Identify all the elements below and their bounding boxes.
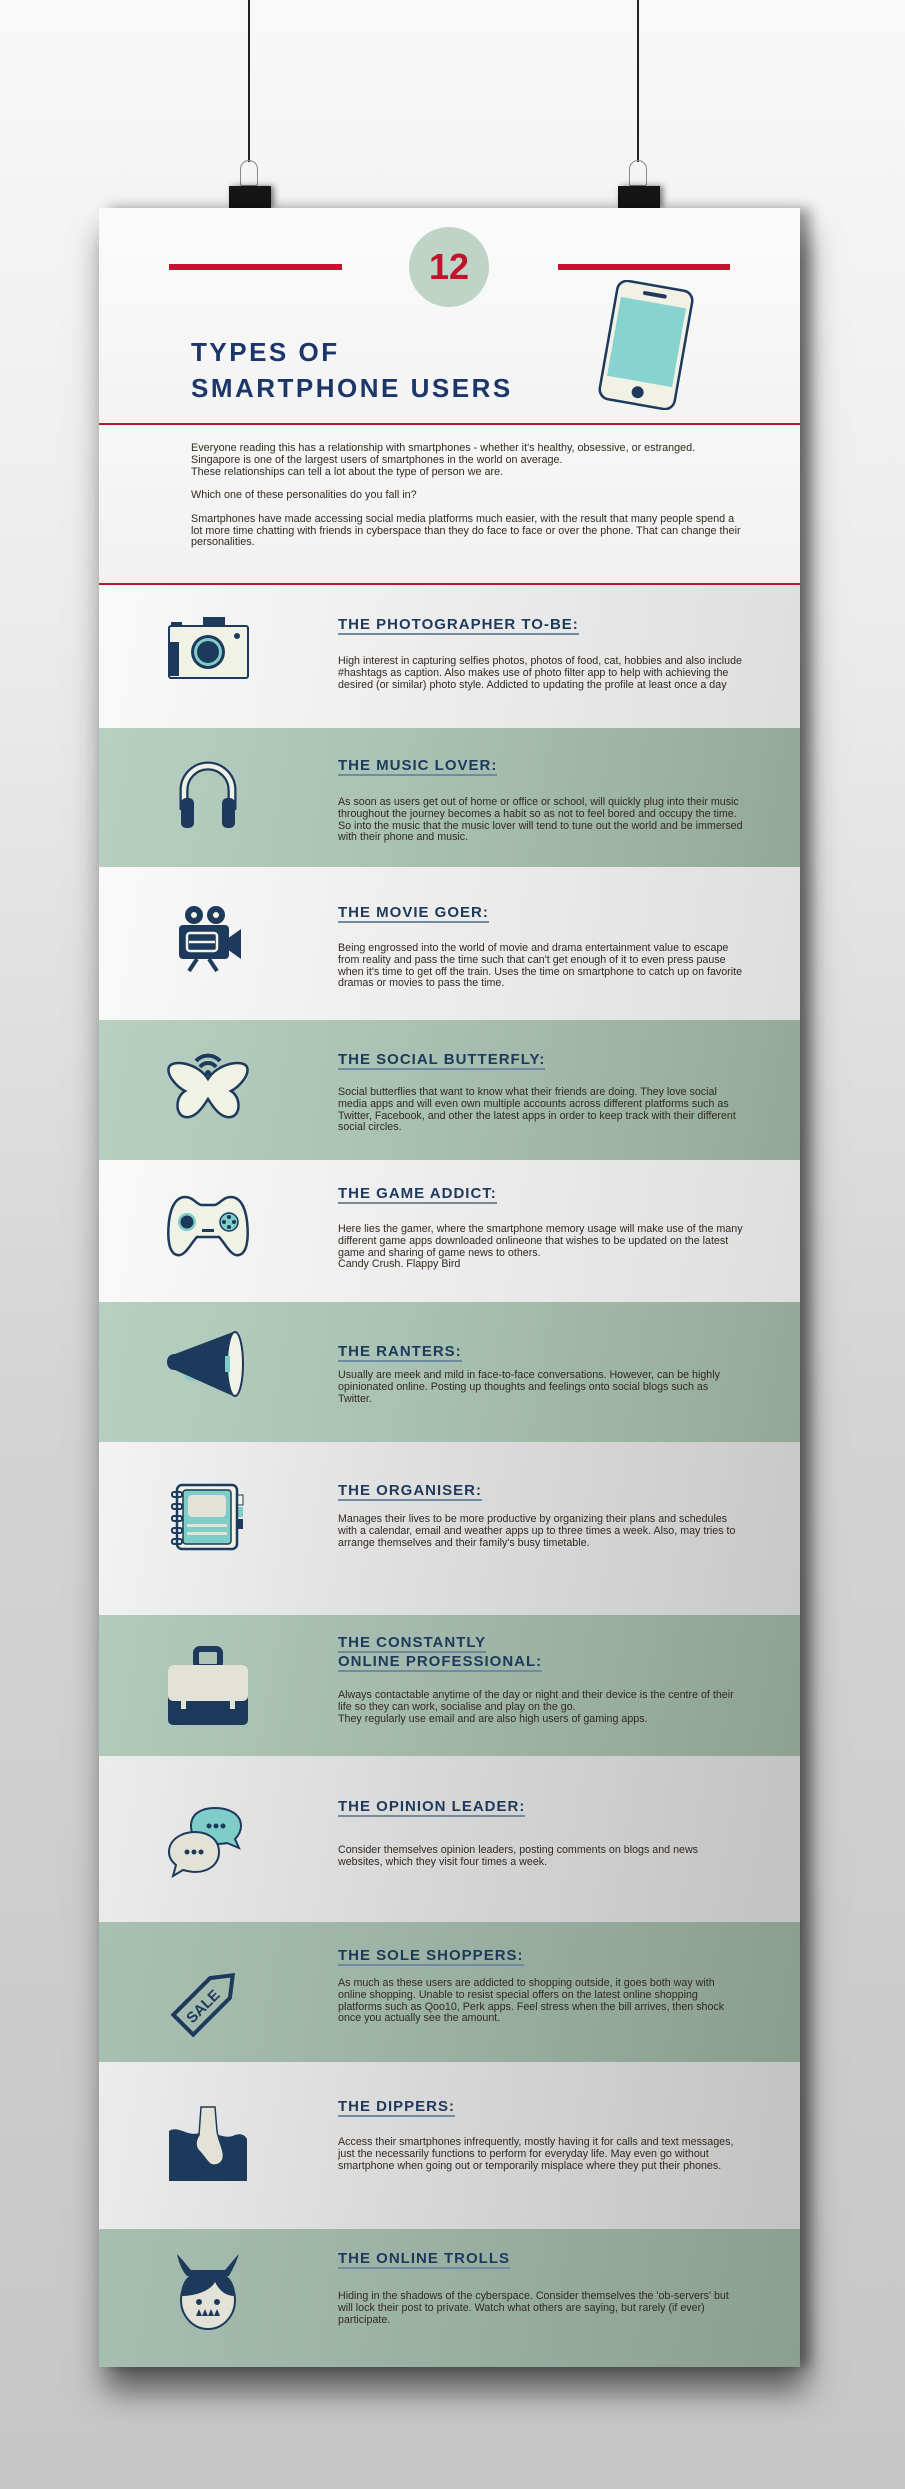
- hanging strings and clips: [228, 0, 668, 208]
- panel: dippers: [99, 2062, 800, 2229]
- text: Being engrossed into the world of movie and drama entertainment value to escape from reality and pass the time such that can't get enough of it to even press pause when it's time to get off the train. Uses the time on smartphone to catch up on favorite dramas or movies to pass the time.: [338, 942, 742, 989]
- icon: sale tag: [170, 1973, 235, 2038]
- panel: social butterfly: [99, 1020, 800, 1160]
- intro text: [99, 425, 800, 584]
- panel: constantly online professional: [99, 1615, 800, 1756]
- icon: troll face: [177, 2254, 239, 2330]
- panel: ranters: [99, 1302, 800, 1442]
- text: [338, 1689, 734, 1725]
- icon: briefcase: [168, 1646, 248, 1725]
- heading: THE SOLE SHOPPERS:: [338, 1947, 524, 1964]
- icon: butterfly with wifi: [167, 1054, 249, 1118]
- panel: opinion leader: [99, 1756, 800, 1922]
- text: Here lies the gamer, where the smartphone memory usage will make use of the many different game apps downloaded onlineone that wishes to be updated on the latest game and sharing of game news to others.: [338, 1223, 743, 1259]
- heading: [338, 1634, 542, 1672]
- heading: ONLINE PROFESSIONAL:: [338, 1653, 542, 1670]
- text: Manages their lives to be more productive by organizing their plans and schedules with a calendar, email and weather apps up to three times a week. Also, may tries to arrange themselves and their family's busy timetable.: [338, 1513, 735, 1549]
- heading: THE MOVIE GOER:: [338, 904, 489, 921]
- intro text: These relationships can tell a lot about the type of person we are.: [191, 466, 503, 478]
- heading: THE MUSIC LOVER:: [338, 757, 497, 774]
- intro text: Everyone reading this has a relationship with smartphones - whether it's healthy, obsessive, or estranged.: [191, 442, 695, 454]
- panel: music lover: [99, 728, 800, 867]
- header: [99, 208, 800, 423]
- text: Usually are meek and mild in face-to-face conversations. However, can be highly opinionated online. Posting up thoughts and feelings onto social blogs such as Twitter.: [338, 1369, 720, 1405]
- text: Always contactable anytime of the day or night and their device is the centre of their life so they can work, socialise and play on the go.: [338, 1689, 734, 1713]
- panel: photographer: [99, 585, 800, 728]
- poster: [99, 208, 800, 2367]
- heading: THE ORGANISER:: [338, 1482, 482, 1499]
- icon: game controller: [167, 1196, 249, 1256]
- panel: sole shoppers: [99, 1922, 800, 2062]
- heading: THE PHOTOGRAPHER TO-BE:: [338, 616, 579, 633]
- icon: camera: [168, 617, 249, 679]
- panel: game addict: [99, 1160, 800, 1302]
- heading: THE ONLINE TROLLS: [338, 2250, 510, 2267]
- title: SMARTPHONE USERS: [191, 373, 513, 403]
- intro text: Which one of these personalities do you fall in?: [191, 489, 417, 501]
- text: Access their smartphones infrequently, mostly having it for calls and text messages, just the necessarily functions to perform for everyday life. May even go without smartphone when going out or temporarily misplace where they put their phones.: [338, 2136, 733, 2172]
- text: As soon as users get out of home or office or school, will quickly plug into their music throughout the journey becomes a habit so as not to feel bored and occupy the time. So into the music that the music lover will tend to tune out the world and be immersed with their phone and music.: [338, 796, 743, 843]
- panel: movie goer: [99, 867, 800, 1020]
- icon: sale tag: SALE: [183, 1987, 224, 2027]
- icon: foot dipping: [169, 2106, 247, 2181]
- icon: chat bubbles: [168, 1807, 242, 1878]
- heading: THE SOCIAL BUTTERFLY:: [338, 1051, 545, 1068]
- panel: organiser: [99, 1442, 800, 1615]
- text: Consider themselves opinion leaders, posting comments on blogs and news websites, which they visit four times a week.: [338, 1844, 698, 1868]
- heading: THE GAME ADDICT:: [338, 1185, 497, 1202]
- title: TYPES OF: [191, 337, 340, 367]
- text: Candy Crush. Flappy Bird: [338, 1258, 460, 1270]
- text: Social butterflies that want to know what their friends are doing. They love social media apps and will even own multiple accounts across different platforms such as Twitter, Facebook, and other the latest apps in order to keep track with their different social circles.: [338, 1086, 736, 1133]
- badge: 12: [409, 227, 489, 307]
- heading: THE DIPPERS:: [338, 2098, 455, 2115]
- icon: megaphone: [167, 1331, 244, 1397]
- heading: THE OPINION LEADER:: [338, 1798, 525, 1815]
- intro text: Singapore is one of the largest users of smartphones in the world on average.: [191, 454, 563, 466]
- text: They regularly use email and are also high users of gaming apps.: [338, 1713, 648, 1725]
- heading: THE RANTERS:: [338, 1343, 462, 1360]
- intro text: Smartphones have made accessing social media platforms much easier, with the result that many people spend a lot more time chatting with friends in cyberspace than they do face to face or over the phone. That can change their personalities.: [191, 513, 741, 548]
- heading: THE CONSTANTLY: [338, 1634, 486, 1651]
- title: [191, 337, 513, 403]
- text: High interest in capturing selfies photos, photos of food, cat, hobbies and also include #hashtags as caption. Also makes use of photo filter app to help with achieving the desired (or similar) photo style. Addicted to updating the profile at least once a day: [338, 655, 742, 691]
- text: Hiding in the shadows of the cyberspace. Consider themselves the 'ob-servers' but will lock their post to private. Watch what others are saying, but rarely (if ever) participate.: [338, 2290, 729, 2326]
- text: As much as these users are addicted to shopping outside, it goes both way with online shopping. Unable to resist special offers on the latest online shopping platforms such as Qoo10, Perk apps. Feel stress when the bill arrives, then shock once you actually see the amount.: [338, 1977, 724, 2024]
- icon: headphones: [180, 762, 236, 828]
- badge: 12: 12: [429, 246, 469, 287]
- panel: online trolls: [99, 2229, 800, 2367]
- icon: organiser: [171, 1484, 244, 1550]
- icon: smartphone: [598, 280, 694, 410]
- icon: movie camera: [179, 906, 241, 972]
